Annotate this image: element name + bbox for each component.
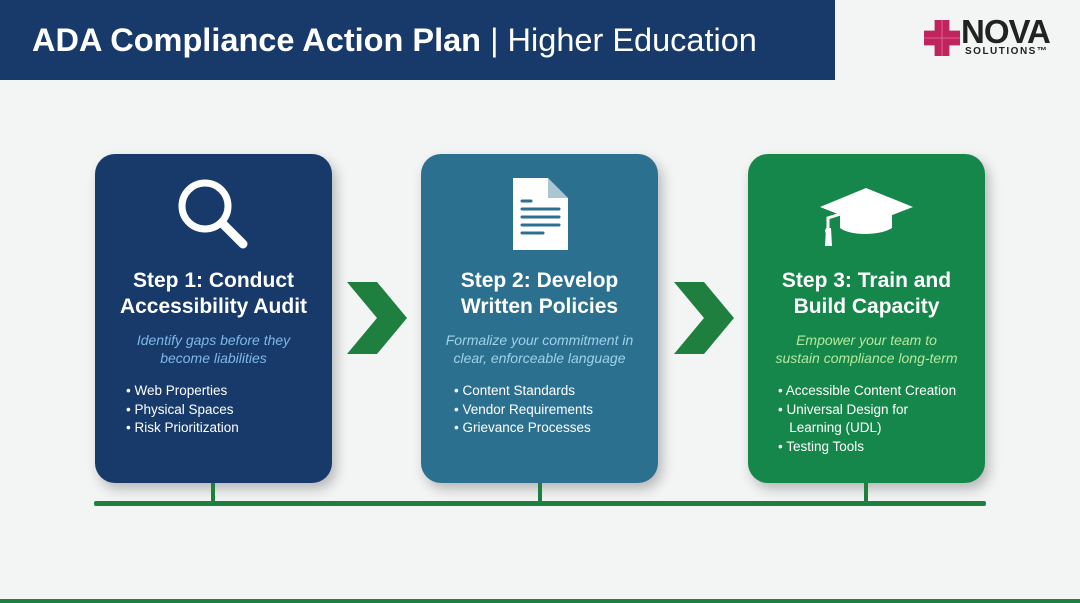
- card 2: clear, enforceable language: [453, 350, 626, 366]
- arrow 1: [347, 282, 407, 354]
- logo: [924, 13, 1050, 57]
- icon: graduation cap: [820, 188, 913, 246]
- card 3: Build Capacity: [794, 295, 939, 318]
- card 2: Formalize your commitment in: [446, 332, 633, 348]
- card 3: Accessible Content Creation: [786, 383, 956, 398]
- card 3: sustain compliance long-term: [775, 350, 958, 366]
- header bar: [0, 0, 835, 80]
- bottom bar: [0, 599, 1080, 603]
- card 1: Step 1: Conduct: [133, 269, 294, 292]
- header bar: ADA Compliance Action Plan | Higher Education: [32, 22, 757, 58]
- card 1: Accessibility Audit: [120, 295, 307, 318]
- card 2: [421, 154, 658, 483]
- card 3: Universal Design for: [786, 402, 908, 416]
- card 1: Identify gaps before they: [137, 332, 290, 348]
- timeline: [94, 501, 986, 506]
- card 2: Written Policies: [461, 295, 618, 318]
- arrow 2: [674, 282, 734, 354]
- card 3: Empower your team to: [796, 332, 937, 348]
- logo: NOVA: [961, 13, 1050, 50]
- card 2: Content Standards: [462, 383, 575, 398]
- card 1: [95, 154, 332, 483]
- card 2: Step 2: Develop: [461, 269, 618, 292]
- card 3: Learning (UDL): [789, 420, 882, 435]
- card 3: Testing Tools: [786, 438, 864, 454]
- card 1: Physical Spaces: [134, 402, 234, 416]
- card 1: Web Properties: [134, 383, 227, 398]
- logo: SOLUTIONS™: [965, 46, 1048, 57]
- icon: document: [513, 178, 568, 250]
- card 3: Step 3: Train and: [782, 269, 951, 292]
- icon: magnifier: [178, 180, 248, 248]
- card 2: Grievance Processes: [462, 420, 591, 435]
- card 2: Vendor Requirements: [462, 402, 593, 416]
- card 1: Risk Prioritization: [134, 420, 239, 435]
- card 1: become liabilities: [160, 350, 267, 366]
- card 3: [748, 154, 985, 483]
